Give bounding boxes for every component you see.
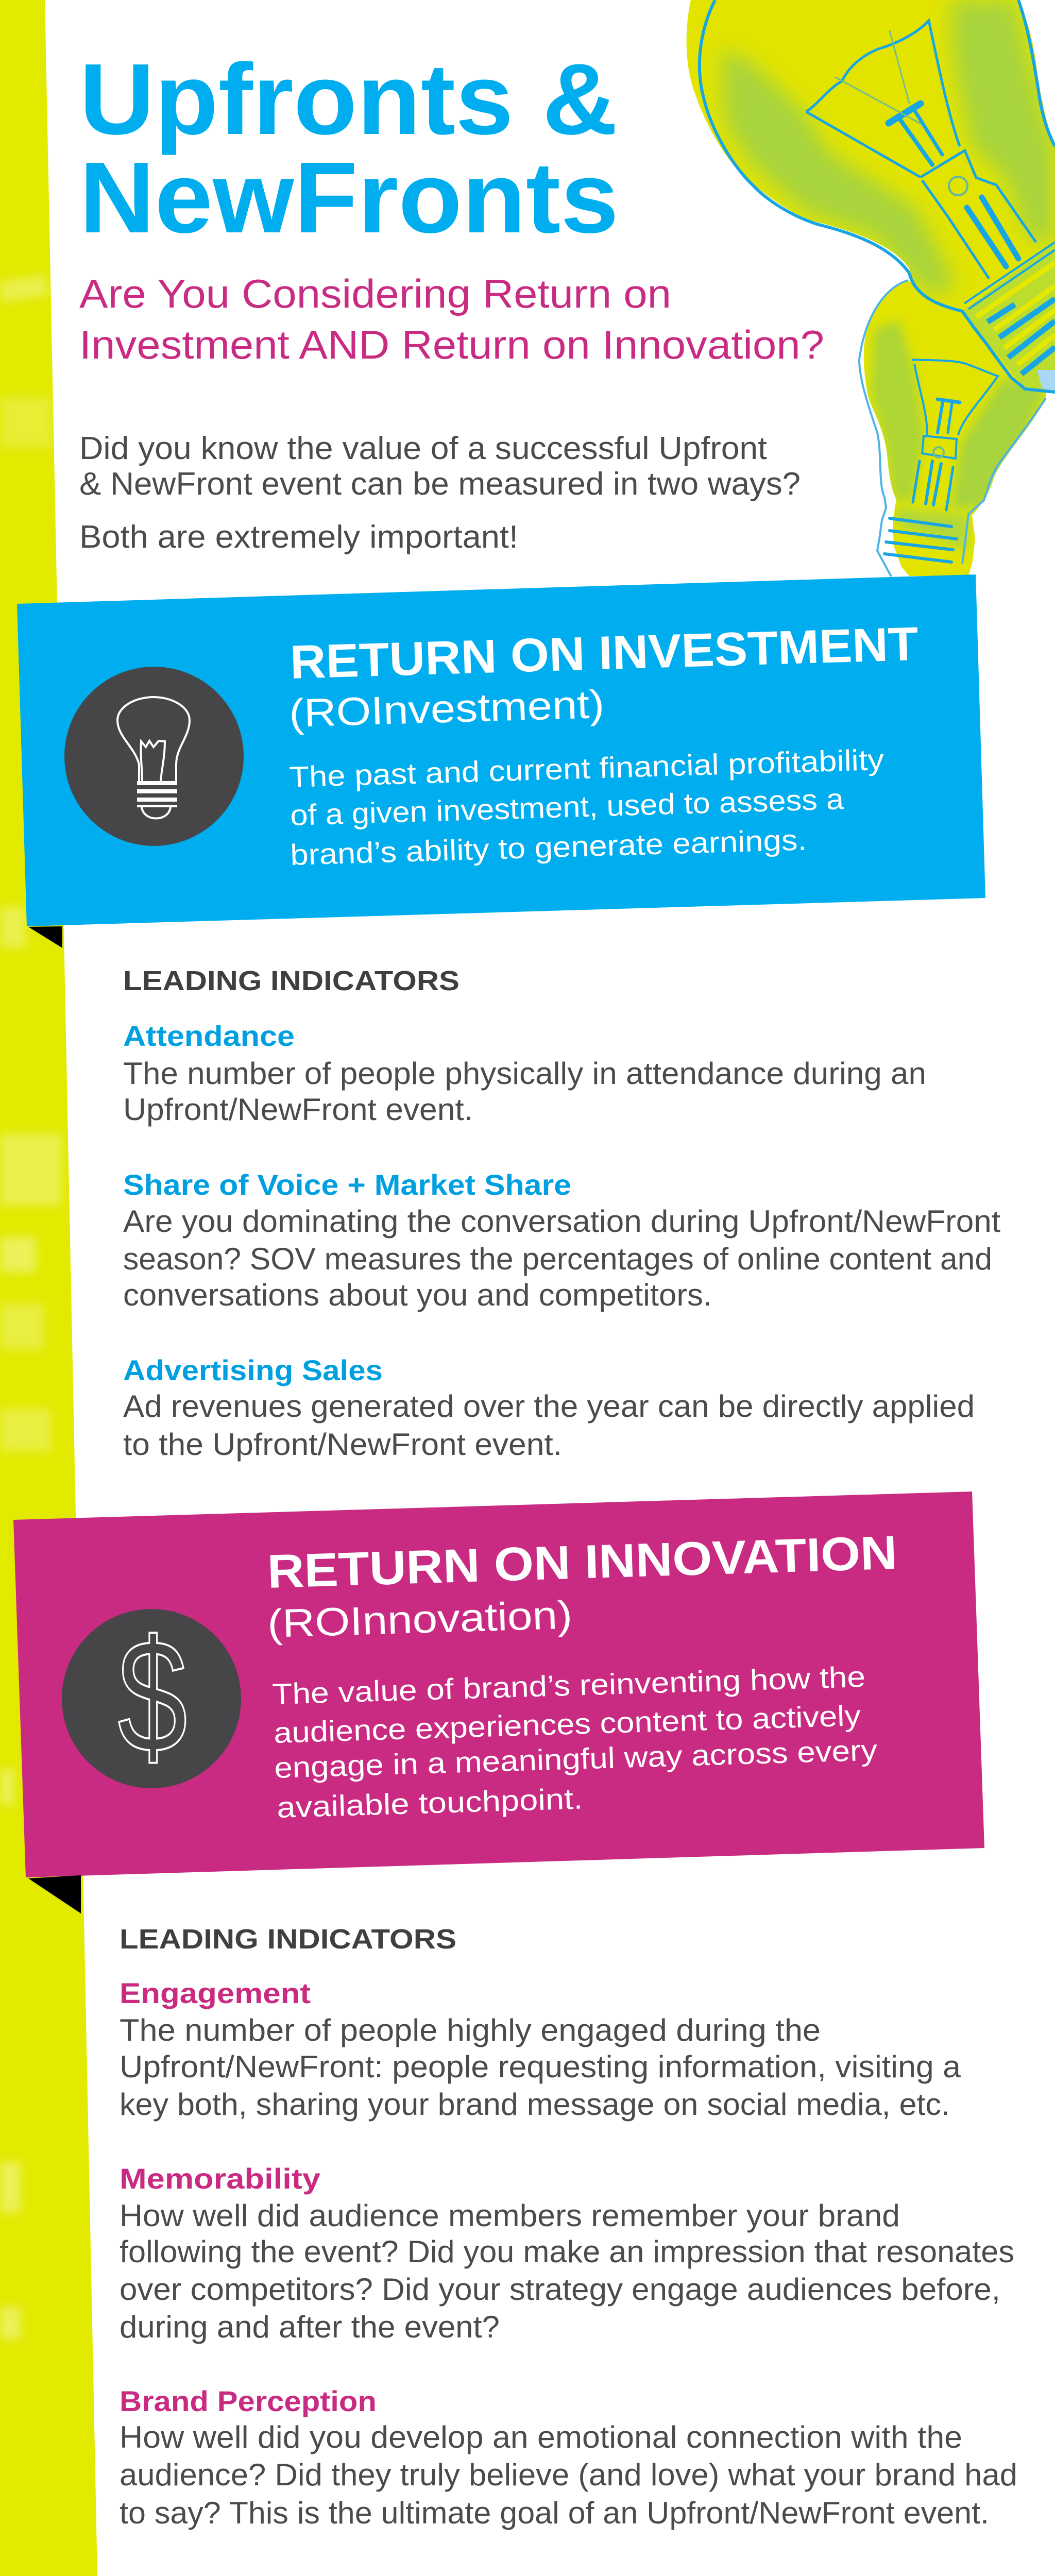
indicator: brand perception: Brand Perception	[120, 2385, 377, 2417]
title: Upfronts &	[79, 43, 618, 156]
indicator: memorability: Memorability	[120, 2162, 320, 2195]
panel: ROInnovation leading indicators	[120, 1924, 1017, 2530]
banner description: engage in a meaningful way across every	[274, 1734, 878, 1785]
indicator: engagement	[120, 1977, 961, 2122]
indicator: engagement: Upfront/NewFront: people requesting information, visiting a	[120, 2049, 961, 2084]
indicator: attendance: Upfront/NewFront event.	[123, 1092, 473, 1127]
banner description: of a given investment, used to assess a	[290, 783, 844, 832]
indicator: brand perception: audience? Did they truly believe (and love) what your brand had	[120, 2458, 1017, 2492]
subtitle: Investment AND Return on Innovation?	[79, 322, 824, 367]
fold: black triangle below blue banner	[28, 926, 62, 948]
indicator: memorability: over competitors? Did your strategy engage audiences before,	[120, 2272, 1000, 2307]
indicator: brand perception: to say? This is the ultimate goal of an Upfront/NewFront event.	[120, 2496, 989, 2530]
icon: small light bulb illustration	[859, 280, 1048, 577]
banner description: The value of brand’s reinventing how the	[271, 1660, 866, 1711]
title	[79, 43, 619, 254]
indicator: memorability: following the event? Did you make an impression that resonates	[120, 2234, 1014, 2269]
indicator: share of voice	[123, 1168, 1000, 1312]
banner description	[271, 1660, 878, 1824]
intro text: & NewFront event can be measured in two ways?	[79, 466, 801, 502]
banner description: audience experiences content to actively	[273, 1699, 861, 1750]
indicator: brand perception: How well did you develop an emotional connection with the	[120, 2420, 962, 2454]
intro text: Both are extremely important!	[79, 519, 518, 555]
banner subheading: (ROInvestment)	[288, 682, 605, 736]
fold: black triangle below magenta banner	[28, 1875, 81, 1913]
indicator: share of voice: Are you dominating the conversation during Upfront/NewFront	[123, 1204, 1000, 1239]
intro text: Did you know the value of a successful Upfront	[79, 431, 767, 466]
indicator: attendance: The number of people physically in attendance during an	[123, 1056, 926, 1091]
indicator: advertising sales: to the Upfront/NewFront event.	[123, 1427, 562, 1462]
panel: return on innovation banner	[13, 1492, 984, 1913]
panel: return on investment banner	[17, 574, 985, 948]
banner heading: RETURN ON INVESTMENT	[290, 618, 919, 689]
indicator: memorability: during and after the event?	[120, 2310, 500, 2344]
indicator: memorability: How well did audience members remember your brand	[120, 2198, 900, 2233]
banner subheading: (ROInnovation)	[267, 1592, 573, 1646]
indicator: attendance	[123, 1020, 926, 1127]
indicator: brand perception	[120, 2385, 1017, 2530]
intro text	[79, 431, 801, 555]
banner description: brand’s ability to generate earnings.	[290, 823, 807, 872]
indicator: share of voice: season? SOV measures the percentages of online content and	[123, 1242, 992, 1276]
subtitle: Are You Considering Return on	[79, 271, 671, 316]
indicator: share of voice: conversations about you and competitors.	[123, 1278, 712, 1312]
heading: leading indicators: LEADING INDICATORS	[120, 1924, 456, 1955]
indicator: advertising sales	[123, 1354, 975, 1462]
banner description	[288, 743, 884, 872]
indicator: advertising sales: Advertising Sales	[123, 1354, 383, 1386]
heading: leading indicators: LEADING INDICATORS	[123, 965, 460, 996]
indicator: engagement: key both, sharing your brand message on social media, etc.	[120, 2087, 950, 2122]
indicator: attendance: Attendance	[123, 1020, 295, 1052]
indicator: advertising sales: Ad revenues generated over the year can be directly applied	[123, 1389, 975, 1423]
panel: ROInvestment leading indicators	[123, 965, 1000, 1462]
subtitle	[79, 271, 824, 367]
banner description: The past and current financial profitability	[288, 743, 884, 794]
title: NewFronts	[79, 141, 619, 254]
indicator: engagement: Engagement	[120, 1977, 311, 2009]
indicator: engagement: The number of people highly engaged during the	[120, 2013, 821, 2047]
banner heading: RETURN ON INNOVATION	[266, 1527, 898, 1598]
background: yellow left strip	[0, 0, 97, 2576]
indicator: memorability	[120, 2162, 1014, 2344]
icon: large light bulb illustration	[687, 0, 1055, 394]
icon: dollar sign in dark circle: $	[117, 1607, 188, 1786]
banner description: available touchpoint.	[276, 1782, 583, 1824]
indicator: share of voice: Share of Voice + Market Share	[123, 1168, 571, 1201]
icon: light bulb in dark circle	[64, 667, 244, 846]
icon: dollar sign in dark circle	[62, 1607, 241, 1788]
